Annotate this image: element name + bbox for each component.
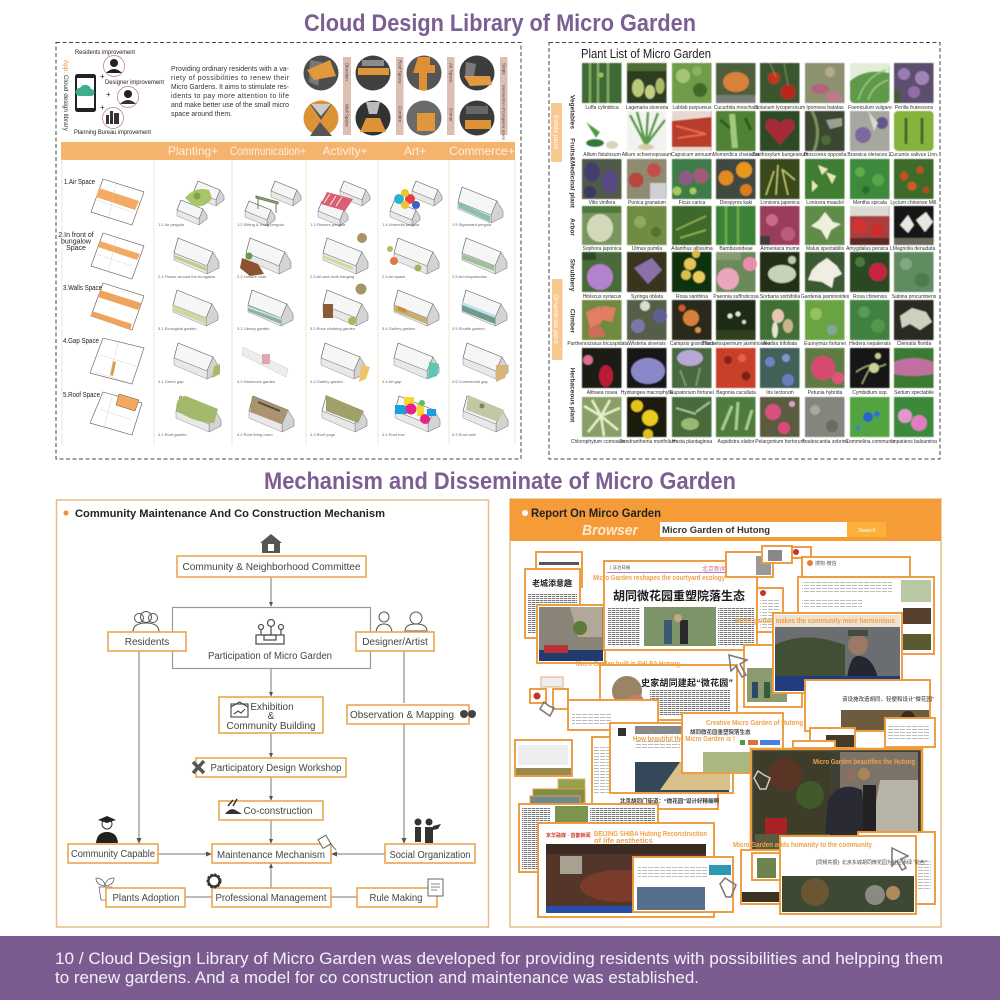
panel: community mechanism flowchart bbox=[56, 500, 488, 927]
clipping: portrait article: 该设施改造胡同，轻便和设计“微花园” bbox=[842, 695, 934, 703]
space type plan column: 5.Roof Space bbox=[63, 392, 100, 399]
space type photo circles: Corner bbox=[448, 108, 454, 122]
clipping: news shiba hutong bbox=[600, 665, 737, 720]
node: residents bbox=[108, 612, 186, 651]
plant row 1: Lagenaria siceraria bbox=[626, 105, 668, 111]
category labels: Arbor bbox=[568, 218, 576, 236]
panel: media reports browser bbox=[510, 499, 941, 927]
plant row 1 bbox=[582, 63, 934, 111]
plant row 1: Luffa cylindrica bbox=[585, 105, 619, 111]
collage headline labels: Micro Garden adds humanity to the community bbox=[733, 840, 873, 849]
clipping: creative micro garden: 胡同微花园重塑院落生态 bbox=[690, 728, 751, 736]
plant row 1: Ipomoea batatas bbox=[806, 105, 844, 111]
plant row 6: Akebia trifoliata bbox=[763, 341, 797, 347]
matrix captions: 1.3 Flowers pergola bbox=[310, 222, 346, 227]
clipping: small articles left bbox=[525, 552, 582, 638]
space type photo circles: Roof Space bbox=[398, 60, 402, 84]
clipping: plants stack bbox=[530, 779, 585, 806]
plant row 1: Perilla frutescens bbox=[895, 105, 934, 111]
plant row 2: Zanthoxylum bungeanum bbox=[752, 152, 808, 158]
intro paragraph: Providing ordinary residents with a va- bbox=[171, 66, 290, 73]
clipping: web items top bbox=[726, 546, 811, 632]
node: community capable: Community Capable bbox=[71, 849, 155, 860]
caption bar bbox=[0, 936, 1000, 1000]
plant row 7: Hydrangea macrophylla bbox=[621, 390, 674, 396]
intro paragraph bbox=[171, 66, 290, 118]
matrix header band: Communication+ bbox=[230, 144, 306, 158]
matrix captions: 1.2 Sitting & Hang pergola bbox=[237, 222, 284, 227]
node: co-construction bbox=[219, 799, 323, 820]
matrix captions: 2.3 Art and cloth hanging bbox=[310, 274, 354, 279]
plant row 6: Campsis grandiflora bbox=[670, 341, 714, 347]
clipping: small video stack bbox=[741, 832, 935, 904]
plant row 6: Wisteria sinensis bbox=[628, 341, 666, 347]
node: maintenance mechanism bbox=[212, 835, 336, 863]
space type photo circles: Corridor bbox=[398, 106, 402, 123]
row 4: gap bbox=[174, 343, 509, 382]
clipping: search results: 搜狗·微信 bbox=[815, 560, 837, 567]
plant row 3 bbox=[582, 159, 938, 206]
plant row 3: Punica granatum bbox=[628, 200, 666, 206]
plant row 5: Sabina procumbens bbox=[892, 294, 937, 300]
space type photo circles: Steps bbox=[502, 63, 506, 75]
matrix captions: 2.4 Art space bbox=[382, 274, 406, 279]
node: co-construction: Co-construction bbox=[244, 806, 312, 817]
matrix captions: 3.2 Library garden bbox=[237, 326, 269, 331]
clipping: lower video: [同频共振]· 北京东城胡同微花园为社区添绿 “彩色” bbox=[816, 859, 927, 866]
node: social organization: Social Organization bbox=[390, 850, 470, 861]
intro paragraph: riety of possibilities to renew their bbox=[171, 75, 290, 82]
row 5: roof bbox=[176, 395, 508, 432]
node: plants adoption: Plants Adoption bbox=[112, 893, 180, 904]
cursor icons bbox=[540, 655, 908, 897]
matrix header band: Art+ bbox=[404, 144, 426, 158]
space type plan column: bungalow bbox=[61, 238, 92, 246]
plant row 6: Parthenocissus tricuspidata bbox=[567, 341, 629, 347]
node: rule making: Rule Making bbox=[370, 893, 422, 904]
clipping: newspaper headline: 北京新闻 bbox=[702, 565, 726, 573]
node: participatory design workshop: Participatory Design Workshop bbox=[210, 763, 342, 774]
collage headline labels: of life aesthetics bbox=[594, 836, 653, 845]
matrix header band: Commerce+ bbox=[449, 144, 515, 158]
matrix captions: 1.1 Air pergola bbox=[158, 222, 185, 227]
plant row 6: Euonymus fortunei bbox=[804, 341, 846, 347]
plant row 1: Solanum lycopersicum bbox=[755, 105, 805, 111]
plant row 7: Sedum spectabile bbox=[894, 390, 934, 396]
plant row 4: Malus spectabilis bbox=[806, 246, 845, 252]
plant row 8: Tradescantia zebrina bbox=[802, 439, 848, 445]
plant row 2 bbox=[582, 111, 938, 158]
clipping: video with wall garden bbox=[537, 605, 605, 663]
plant row 4: Armeniaca mume bbox=[760, 246, 800, 252]
app concept diagram: Designer improvement bbox=[105, 79, 164, 86]
matrix captions: 1.5 Signboard pergola bbox=[452, 222, 492, 227]
category pill: ornamental plant bbox=[552, 279, 562, 360]
plant row 8: Impatiens balsamina bbox=[891, 439, 937, 445]
browser header: Report On Mirco Garden bbox=[531, 508, 661, 520]
plant row 3: Lonicera maackii bbox=[806, 200, 844, 206]
title: Mechanism and Disseminate of Micro Garden: Mechanism and Disseminate of Micro Garden bbox=[264, 468, 736, 495]
plant row 7: Althaea rosea bbox=[587, 390, 618, 396]
matrix captions: 3.5 Shuttle garden bbox=[452, 326, 485, 331]
plant row 5: Rosa chinensis bbox=[853, 294, 887, 300]
plant row 5: Sorbaria sorbifolia bbox=[760, 294, 800, 300]
node: observation and mapping: Observation & Mapping bbox=[350, 710, 454, 721]
matrix captions: 1.4 Umbrella pergola bbox=[382, 222, 420, 227]
node: observation and mapping bbox=[347, 705, 476, 724]
plant row 2: Momordica charantia bbox=[713, 152, 760, 158]
matrix header band: Activity+ bbox=[322, 144, 368, 158]
node: professional management bbox=[208, 875, 331, 907]
plant row 1: Cucurbita moschata bbox=[714, 105, 758, 111]
plant row 4: Bambusoideae bbox=[719, 246, 753, 252]
plant list heading: Plant List of Micro Garden bbox=[581, 46, 711, 61]
panel: cloud design library bbox=[56, 42, 521, 459]
row 2: in front of bungalow bbox=[174, 233, 507, 276]
node: professional management: Professional Management bbox=[216, 893, 327, 904]
collage headline labels bbox=[576, 573, 915, 849]
matrix captions: 3.3 Rock climbing garden bbox=[310, 326, 355, 331]
collage headline labels: Micro Garden beautifies the Hutong bbox=[813, 757, 915, 766]
space type plan column: Space bbox=[66, 245, 86, 252]
node: participatory design workshop bbox=[193, 758, 346, 777]
isometric house matrix bbox=[173, 181, 509, 432]
category labels bbox=[568, 95, 576, 423]
plant row 3: Diospyros kaki bbox=[720, 200, 752, 206]
plant row 8 bbox=[571, 397, 937, 445]
category labels: Fruits&Medicinal plant bbox=[568, 138, 576, 209]
app concept diagram bbox=[62, 49, 164, 136]
app concept diagram: + bbox=[106, 90, 111, 99]
node: plants adoption bbox=[96, 878, 185, 907]
plant row 7: Cymbidium ssp. bbox=[852, 390, 888, 396]
caption bar: 10 / Cloud Design Library of Micro Garden was developed for providing residents with possibilities and helpping them bbox=[55, 950, 943, 968]
plant row 8: Pelargonium hortorum bbox=[755, 439, 805, 445]
caption bar: to renew gardens. And a model for co construction and maintenance was established. bbox=[55, 969, 699, 987]
matrix captions: 4.1 Green gap bbox=[158, 379, 184, 384]
node: rule making bbox=[357, 879, 443, 907]
clipping: search results bbox=[798, 557, 934, 654]
plant row 5 bbox=[582, 250, 937, 300]
space type photo circles: Air Space bbox=[448, 63, 454, 83]
clipping: lower video bbox=[780, 836, 927, 914]
plant row 5: Rosa xanthina bbox=[676, 294, 708, 300]
space type photo circles bbox=[304, 56, 508, 141]
category labels: Vegetables bbox=[568, 95, 576, 129]
plant row 2: Cucumis sativus Linn. bbox=[890, 152, 938, 158]
space type plan column bbox=[58, 179, 144, 435]
plant row 3: Lycium chinense Mill. bbox=[890, 200, 938, 206]
plant row 7: Iris tectorum bbox=[766, 390, 794, 396]
node: maintenance mechanism: Maintenance Mechanism bbox=[217, 850, 325, 861]
node: community committee bbox=[177, 534, 366, 577]
node: participation of micro garden: Participation of Micro Garden bbox=[208, 651, 332, 662]
browser header: Search bbox=[858, 528, 876, 534]
plant row 5: Paeonia suffruticosa bbox=[713, 294, 759, 300]
plant row 4: Ulmus pumila bbox=[632, 246, 662, 252]
clipping: phone thumbnails bbox=[530, 677, 658, 730]
browser header bbox=[510, 499, 941, 541]
clipping: portrait article bbox=[805, 680, 934, 731]
collage headline labels: Micro Garden reshapes the courtyard ecology bbox=[593, 573, 726, 582]
app concept diagram: App: Cloud design library bbox=[62, 60, 69, 132]
clipping: newspaper headline: 胡同微花园重塑院落生态 bbox=[613, 588, 745, 603]
plant row 8: Commelina communis bbox=[845, 439, 895, 445]
matrix captions: 4.4 Art gap bbox=[382, 379, 402, 384]
plant row 4: Amygdalus persica L. bbox=[846, 246, 894, 252]
flow connectors bbox=[136, 577, 406, 897]
app concept diagram: + bbox=[100, 72, 105, 81]
plant row 3: Mentha spicata bbox=[853, 200, 887, 206]
category pill: edible plant: Edible plant bbox=[552, 115, 559, 149]
node: residents: Residents bbox=[125, 637, 169, 648]
browser header: Micro Garden of Hutong bbox=[662, 525, 770, 536]
collage headline labels: How beautiful the Micro Garden is ! bbox=[633, 734, 735, 743]
clipping: newspaper headline bbox=[604, 561, 757, 650]
plant row 1: Foeniculum vulgare bbox=[848, 105, 892, 111]
matrix captions: 4.3 Gallery garden bbox=[310, 379, 343, 384]
category labels: Shrubbery bbox=[568, 259, 576, 292]
matrix header band: Planting+ bbox=[168, 144, 218, 158]
plant row 7: Eupatorium fortunei bbox=[670, 390, 714, 396]
app concept diagram: Residents improvement bbox=[75, 49, 135, 56]
press clippings collage bbox=[515, 546, 935, 917]
plant row 8: Dendranthema morifolium bbox=[619, 439, 677, 445]
plant row 6: Hedera nepalensis bbox=[849, 341, 891, 347]
plant row 3: Lonicera japonica bbox=[760, 200, 800, 206]
matrix captions: 4.2 Hammock garden bbox=[237, 379, 275, 384]
plant row 5: Gardenia jasminoides bbox=[801, 294, 850, 300]
plant row 2: Capsicum annuum bbox=[671, 152, 713, 158]
space type plan column: 4.Gap Space bbox=[63, 338, 99, 345]
plant row 2: Dioscorea opposita bbox=[804, 152, 847, 158]
app concept diagram: + bbox=[100, 103, 105, 112]
clipping: small web left bbox=[515, 740, 572, 776]
collage headline labels: Creative Micro Garden of Hutong bbox=[706, 718, 803, 727]
clipping: news shiba hutong: 史家胡同建起“微花园” bbox=[641, 677, 733, 688]
node: exhibition and community building: Exhibition bbox=[250, 702, 294, 713]
plant row 3: Ficus carica bbox=[679, 200, 706, 206]
category pill: edible plant bbox=[551, 103, 562, 162]
intro paragraph: and make better use of the small micro bbox=[171, 102, 289, 109]
matrix header band bbox=[61, 142, 515, 160]
matrix captions: 5.3 Roof cafe bbox=[452, 432, 477, 437]
plant row 4 bbox=[582, 206, 935, 252]
plant row 2: Allium schoenoprasum bbox=[622, 152, 672, 158]
plant row 6: Trachelospermum jasminoides bbox=[702, 341, 770, 347]
node: designer and artist: Designer/Artist bbox=[362, 637, 428, 648]
intro paragraph: Micro Gardens. It aims to stimulate res- bbox=[171, 84, 290, 91]
plant row 1: Lablab purpureus bbox=[673, 105, 712, 111]
space type photo circles: Wall Space bbox=[344, 104, 350, 127]
clipping: small articles left: 老城添意趣 bbox=[532, 578, 572, 588]
collage headline labels: Micro Garden built in SHLBA Hutong bbox=[576, 659, 680, 668]
plant row 7: Begonia cucullata bbox=[716, 390, 756, 396]
plant row 3: Vitis vinifera bbox=[589, 200, 616, 206]
space type plan column: 1.Air Space bbox=[64, 179, 95, 186]
matrix captions: 2.5 Art shopwindow bbox=[452, 274, 487, 279]
plant row 5: Syringa oblata bbox=[631, 294, 663, 300]
plant row 2: Brassica oleracea L. bbox=[847, 152, 893, 158]
clipping: how beautiful bbox=[592, 723, 733, 809]
category labels: Herbaceous plant bbox=[568, 368, 576, 423]
space type photo circles: Intersection of bungalow space bbox=[502, 85, 506, 141]
space type plan column: 3.Walls Space bbox=[63, 285, 102, 292]
plant row 6 bbox=[567, 300, 934, 347]
node: designer and artist bbox=[356, 612, 434, 651]
collage headline labels: Micro garden makes the community more harmonious bbox=[735, 616, 895, 625]
plant row 4: Sophora japonica bbox=[583, 246, 622, 252]
row 1: air space bbox=[177, 181, 503, 226]
clipping: beijing shiba hutong video: 京华融媒 · 首都新闻 bbox=[546, 832, 590, 839]
matrix captions: 4.2 Roof living room bbox=[237, 432, 273, 437]
plant row 8: Hosta plantaginea bbox=[672, 439, 712, 445]
plant row 6: Clematis florida bbox=[897, 341, 931, 347]
intro paragraph: idents to pay more attention to life bbox=[171, 93, 289, 100]
node: exhibition and community building: Community Building bbox=[227, 721, 315, 732]
clipping: video with portrait bbox=[773, 613, 902, 693]
matrix captions: 4.1 Roof garden bbox=[158, 432, 187, 437]
panel: plant list bbox=[549, 42, 940, 459]
matrix captions: 4.4 Roof box bbox=[382, 432, 405, 437]
clipping: small items right bbox=[793, 718, 935, 748]
plant row 8: Chlorophytum comosum bbox=[571, 439, 625, 445]
app concept diagram: Planning Bureau improvement bbox=[74, 129, 151, 136]
node: social organization bbox=[385, 818, 475, 863]
clipping: beijing shiba hutong video bbox=[538, 823, 714, 917]
clipping: web results middle bbox=[744, 645, 802, 707]
category labels: Climber bbox=[568, 309, 576, 334]
intro paragraph: space around them. bbox=[171, 111, 232, 118]
node: exhibition and community building bbox=[219, 697, 323, 733]
clipping: newspaper headline: | 法治日报 bbox=[610, 564, 631, 571]
clipping: report with photo bbox=[633, 857, 733, 912]
clipping: creative micro garden bbox=[682, 713, 783, 773]
plant row 4: Ailanthus altissima bbox=[671, 246, 713, 252]
plant row 7: Petunia hybrida bbox=[808, 390, 843, 396]
matrix captions: 3.4 Gallery garden bbox=[382, 326, 415, 331]
plant row 5: Hibiscus syriacus bbox=[583, 294, 622, 300]
matrix captions: 2.1 Flower around the bungalow bbox=[158, 274, 215, 279]
node: exhibition and community building: & bbox=[268, 711, 275, 722]
plant row 4: Magnolia denudata bbox=[893, 246, 935, 252]
node: community committee: Community & Neighborhood Committee bbox=[182, 562, 361, 573]
title: Cloud Design Library of Micro Garden: Cloud Design Library of Micro Garden bbox=[304, 10, 696, 37]
plant row 7 bbox=[582, 348, 934, 396]
node: participation of micro garden bbox=[208, 620, 332, 662]
collage headline labels: BEIJING SHIBA Hutong Reconstruction bbox=[594, 829, 707, 838]
node: community capable bbox=[68, 816, 158, 863]
matrix captions bbox=[158, 222, 492, 437]
matrix captions: 3.1 Ecological garden bbox=[158, 326, 196, 331]
clipping: newspaper text bbox=[519, 804, 658, 872]
matrix captions: 4.5 Commercial gap bbox=[452, 379, 489, 384]
plant row 8: Aspidistra elatior bbox=[718, 439, 755, 445]
space type photo circles: Direction bbox=[344, 63, 350, 81]
clipping: how beautiful: 北京胡同门街道：“微花园”设计好精细啊 bbox=[620, 797, 720, 805]
category pill: ornamental plant: Ornamental plant bbox=[552, 294, 559, 344]
matrix captions: 2.2 Leisure chair bbox=[237, 274, 267, 279]
clipping: big video bbox=[751, 749, 922, 853]
plant row 2: Allium fistulosum bbox=[583, 152, 621, 158]
matrix captions: 4.3 Roof yoga bbox=[310, 432, 336, 437]
flowchart heading: Community Maintenance And Co Construction Mechanism bbox=[75, 508, 385, 520]
browser header: Browser bbox=[582, 522, 639, 539]
space type plan column: 2.In front of bbox=[58, 232, 94, 239]
row 3: walls bbox=[173, 284, 507, 326]
